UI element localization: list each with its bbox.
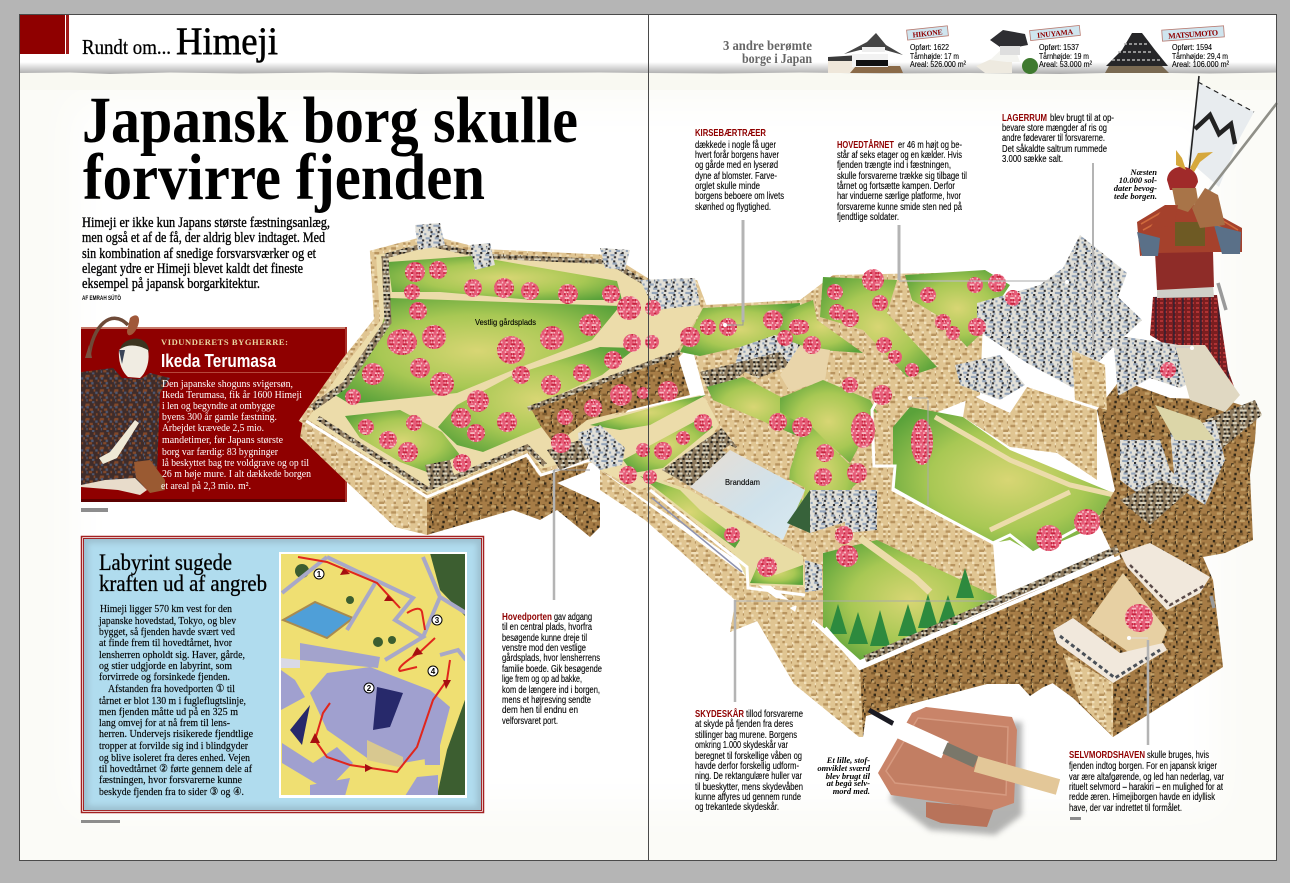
numbered markers	[314, 569, 442, 693]
callout: Skydeskår: ning. De rektangulære huller var	[695, 771, 802, 782]
header: Rundt om... Himeji	[82, 20, 278, 63]
grey end bar	[81, 820, 120, 823]
label Matsumoto: MATSUMOTO	[1168, 28, 1218, 41]
callout: Skydeskår: SKYDESKÅR	[695, 707, 745, 720]
main title: forvirre fjenden	[83, 141, 485, 214]
main keep tower complex	[977, 235, 1142, 388]
Inuyama facts: Opført: 1537	[1039, 42, 1079, 52]
western courtyard ground	[303, 238, 705, 497]
Hikone facts: Opført: 1622	[910, 42, 949, 52]
biography: mandetimer, før Japans største	[162, 434, 283, 446]
callout: small sword caption: at begå selv-	[827, 778, 870, 788]
leader: Kirsebærtræer	[723, 220, 743, 327]
callout: Selvmordshaven: rituelt selvmord – harakiri – en mulighed for at	[1069, 782, 1223, 793]
samurai figure	[1137, 150, 1242, 395]
small gatehouse cluster	[787, 490, 877, 592]
callout: Skydeskår: kunne affyres ud gennem runde	[695, 792, 801, 803]
red enemy route	[298, 557, 450, 772]
callout: Hovedporten	[502, 612, 602, 727]
Hikone facts: Tårnhøjde: 17 m	[910, 51, 959, 61]
biography: Den japanske shoguns svigersøn,	[162, 378, 293, 390]
biography: i len og begyndte at ombygge	[162, 400, 275, 412]
intro text: Himeji er ikke kun Japans største fæstningsanlæg,	[82, 215, 330, 231]
lawn: upper central	[680, 303, 800, 356]
callout: Hovedtårnet: forsvarerne kunne smide sten ned på	[837, 201, 962, 213]
callout: Hovedporten: gårdsplads, hvor lensherrens	[502, 652, 600, 664]
callout: Kirsebærtræer: orglet skulle minde	[695, 181, 760, 192]
callout: Kirsebærtræer: KIRSEBÆRTRÆER	[695, 128, 767, 139]
biography: 26 m høje mure. I alt dækkede borgen	[162, 468, 311, 480]
illustration: samurai with banner	[1137, 76, 1277, 395]
lawn: cedar garden	[823, 540, 997, 660]
Inuyama facts: Areal: 53.000 m²	[1039, 59, 1092, 69]
callout: Hovedtårnet: fjenden trængte ind i fæstningen,	[837, 160, 951, 171]
south parapet of the west court	[306, 421, 590, 497]
inner wall with shaded face	[530, 353, 690, 445]
forest	[295, 553, 466, 796]
numbered markers: 3	[435, 616, 440, 625]
callout: Næsten 10.000 soldater: 10.000 sol-	[1119, 175, 1157, 185]
grey end bar	[81, 508, 108, 512]
lower gate building	[1053, 618, 1167, 683]
numbered markers: 1	[317, 570, 322, 579]
callout: small sword caption: blev brugt til	[826, 771, 871, 781]
callout: Selvmordshaven: skulle bruges, hvis	[1147, 750, 1209, 761]
intro text: AF EMRAH SÜTÖ	[82, 293, 121, 302]
Matsumoto castle fact box	[1105, 26, 1229, 73]
callout: Hovedtårnet: fjendtlige soldater.	[837, 212, 899, 223]
biography: et areal på 2,3 mio. m².	[161, 480, 251, 492]
Inuyama facts: Tårnhøjde: 19 m	[1039, 51, 1089, 61]
map ground	[281, 554, 465, 795]
lawn: north band	[388, 256, 622, 300]
biography: byens 300 år gamle fæstning.	[162, 411, 277, 423]
main keep stone base	[963, 387, 1097, 480]
panel body text: Himeji ligger 570 km vest for den	[100, 603, 232, 615]
callout: Skydeskår	[695, 707, 803, 813]
callout: Hovedporten: dem hen til endnu en	[502, 705, 578, 716]
callout: Lagerrum: LAGERRUM	[1002, 113, 1047, 124]
intro text: elegant ydre er Himeji blevet kaldt det fineste	[82, 261, 303, 277]
callout: Kirsebærtræer: skønhed og flygtighed.	[695, 202, 771, 213]
header: 3 andre berømte borge i Japan	[723, 38, 812, 66]
panel body text: herren. Undervejs risikerede fjendtlige	[99, 728, 253, 740]
fire pond	[690, 450, 805, 540]
lawn: east garden	[893, 407, 1123, 553]
callout: Lagerrum: blev brugt til at op-	[1050, 113, 1114, 124]
panel body text: tropper at forvilde sig ind i blindgyder	[99, 740, 248, 752]
callout: Hovedporten: Hovedporten	[502, 612, 552, 623]
callout: Skydeskår: og trekantede skydeskår.	[695, 801, 779, 813]
lawn: lower terrace	[590, 395, 706, 430]
main south-east wall mass	[1019, 380, 1257, 737]
callout: Skydeskår: beregnet til forskellige våben og	[695, 750, 802, 762]
callout: Næsten 10.000 soldater: Næsten	[1130, 167, 1157, 177]
name heading: Ikeda Terumasa	[161, 351, 277, 371]
Hikone castle fact box	[828, 26, 966, 73]
gate buildings	[547, 335, 830, 470]
header: Rundt om... Himeji: Himeji	[176, 20, 278, 63]
header band with torn paper edge	[20, 15, 1277, 90]
Matsumoto facts	[1172, 42, 1229, 69]
callout: Hovedtårnet: HOVEDTÅRNET	[837, 138, 894, 151]
Inuyama castle fact box	[976, 25, 1092, 74]
blue panel background	[82, 536, 484, 812]
callout: Hovedtårnet: står af seks etager og en kælder. Hvis	[837, 149, 962, 161]
callout: Kirsebærtræer	[695, 128, 784, 213]
east garden court wall	[873, 410, 997, 597]
callout: Skydeskår: tillod forsvarerne	[746, 709, 803, 720]
paths across the east garden	[935, 417, 1123, 530]
panel body text: lang omvej for at nå frem til lens-	[99, 717, 230, 729]
callout: Hovedporten: til en central plads, hvorfra	[502, 622, 592, 633]
lawn: south-west corner	[345, 410, 460, 472]
callout: small sword caption: omviklet sværd	[817, 763, 871, 773]
Matsumoto facts: Tårnhøjde: 29,4 m	[1172, 51, 1228, 61]
callout: Selvmordshaven	[1069, 750, 1224, 820]
callout: Skydeskår: at skyde på fjenden fra deres	[695, 718, 793, 730]
tray top	[878, 707, 1017, 810]
callout: Kirsebærtræer: hvert forår borgens haver	[695, 149, 780, 161]
callout: Hovedporten: gav adgang	[554, 612, 592, 623]
banner flag	[1186, 76, 1254, 200]
Matsumoto facts: Opført: 1594	[1172, 42, 1212, 52]
central ward ground	[600, 272, 985, 627]
biography: Arbejdet krævede 2,5 mio.	[162, 422, 264, 434]
panel body text: til hovedtårnet ② førte gennem dele af	[99, 763, 252, 775]
cherry blossom trees	[345, 261, 1176, 632]
callout: Skydeskår: til bueskytter, mens skydevåben	[695, 781, 803, 793]
Inuyama facts	[1039, 42, 1092, 69]
biography: lå beskyttet bag tre voldgrave og op til	[162, 457, 309, 469]
panel body text: beskyde fjenden fra to sider ③ og ④.	[99, 786, 244, 798]
callout: Skydeskår: stillinger bag murene. Borgens	[695, 730, 797, 741]
callout: Næsten 10.000 soldater	[1114, 167, 1157, 201]
lower tan tower base	[1063, 653, 1113, 737]
panel heading: kraften ud af angreb	[99, 571, 267, 596]
panel heading: Labyrint sugede	[99, 550, 232, 575]
route map	[279, 552, 467, 798]
callout: small sword caption: Et lille, stof-	[826, 755, 870, 765]
lawn: middle terrace	[438, 347, 636, 452]
callout: Selvmordshaven: fjenden indtog borgen. For en japansk kriger	[1069, 761, 1217, 772]
long parapet along south wall	[825, 557, 1120, 668]
corner towers	[415, 223, 700, 485]
panel body text: Afstanden fra hovedporten ① til	[108, 683, 235, 695]
callout: Kirsebærtræer: dækkede i nogle få uger	[695, 139, 777, 151]
panel body text: at finde frem til hovedtårnet, hvor	[99, 637, 232, 649]
leader: inner gate marker	[908, 396, 928, 505]
main title: Japansk borg skulle	[82, 84, 578, 157]
label Inuyama: INUYAMA	[1037, 27, 1074, 40]
panel body text: men fjenden måtte ud på en 325 m	[99, 706, 238, 718]
intro text: men også et af de få, der aldrig blev indtaget. Med	[82, 230, 325, 246]
knife	[869, 710, 1058, 787]
illustration: Himeji castle cutaway	[300, 223, 1262, 737]
callout: Lagerrum: Det såkaldte saltrum rummede	[1002, 143, 1107, 155]
intro text: eksempel på japansk borgarkitektur.	[82, 276, 260, 292]
leader: Lagerrum	[1093, 163, 1194, 350]
callout: Lagerrum: andre fødevarer til forsvarerne.	[1002, 133, 1105, 144]
west wall, sunlit stone	[300, 420, 427, 535]
grey end mark	[1211, 596, 1214, 608]
Matsumoto facts: Areal: 106.000 m²	[1172, 59, 1229, 69]
garden strip south of the pond	[630, 470, 805, 587]
callout: Selvmordshaven: redde æren. Himejiborgen havde en idyllisk	[1069, 792, 1216, 803]
seppuku garden court	[1087, 573, 1167, 658]
callout: Lagerrum: 3.000 sække salt.	[1002, 154, 1063, 165]
leader: Skydeskår	[735, 600, 1000, 702]
panel: Ikeda Terumasa	[81, 315, 347, 502]
callout: Skydeskår: havde derfor forskellig udform-	[695, 761, 799, 772]
intro text: sin kombination af snedige forsvarsværker og et	[82, 246, 317, 262]
Hikone facts: Areal: 526.000 m²	[910, 59, 966, 69]
panel body text: bygget, så fjenden havde svært ved	[99, 626, 235, 638]
cedar trees	[829, 568, 974, 646]
panel body text: og blive isoleret fra deres enhed. Vejen	[99, 752, 250, 764]
main title	[82, 84, 578, 214]
icon: Inuyama castle	[976, 30, 1038, 74]
east upper buildings	[1113, 335, 1262, 525]
route arrowheads	[310, 568, 451, 772]
callout: Hovedporten: kom de længere ind i borgen,	[502, 685, 600, 696]
panel background	[81, 327, 347, 502]
callout: Hovedporten: lige frem og op ad bakke,	[502, 674, 582, 685]
tray shadow	[890, 720, 1022, 835]
callout: Hovedporten: mens et højresving sendte	[502, 695, 591, 706]
north parapet	[385, 244, 695, 288]
callout leader lines	[554, 163, 1194, 745]
header: 3 andre berømte borge i Japan: 3 andre berømte	[723, 38, 812, 53]
fire pond inner wall	[662, 428, 737, 487]
south gate block	[730, 592, 820, 653]
panel: Labyrint	[82, 536, 484, 812]
lower terrace ground	[580, 395, 725, 490]
intro text	[82, 215, 330, 302]
numbered markers: 2	[367, 684, 372, 693]
lawn: western court	[335, 298, 620, 404]
tray foot	[926, 802, 994, 827]
biography: Ikeda Terumasa, fik år 1600 Himeji	[162, 389, 302, 401]
callout: Kirsebærtræer: dyne af blomster. Farve-	[695, 171, 777, 182]
panel body text: fæstningen, hvor forsvarerne kunne	[99, 774, 242, 786]
west inner parapet	[312, 256, 388, 408]
callout: Hovedtårnet: er 46 m højt og be-	[898, 140, 962, 151]
west wall, shaded stone	[427, 455, 590, 535]
callout: Kirsebærtræer: og gårde med en lyserød	[695, 159, 778, 171]
biography	[161, 378, 311, 492]
Hikone facts	[910, 42, 966, 69]
header: 3 andre berømte borge i Japan: borge i Japan	[742, 51, 812, 66]
illustration: tanto knife on wooden tray	[869, 707, 1058, 835]
callout: Kirsebærtræer: borgens beboere om livets	[695, 191, 784, 202]
numbered markers: 4	[431, 667, 436, 676]
biography: borg var færdig: 83 bygninger	[162, 446, 278, 458]
panel body text: lensherren opholdt sig. Haver, gårde,	[99, 649, 245, 661]
pond	[283, 602, 353, 638]
castle label: Vestlig gårdsplads: Vestlig gårdsplads	[475, 317, 536, 327]
icon: Matsumoto castle	[1105, 33, 1169, 73]
callout: Hovedporten: venstre mod den vestlige	[502, 643, 586, 654]
leader: Hovedtårnet	[899, 225, 1069, 284]
callout: Hovedtårnet: skulle forsvarerne trække sig tilbage til	[837, 171, 967, 182]
south-east gate building	[1120, 543, 1210, 610]
central tan walls around the fire pond	[707, 372, 830, 480]
callout: Næsten 10.000 soldater: tede borgen.	[1114, 191, 1157, 201]
leader: Selvmordshaven	[1127, 636, 1148, 745]
keep south annex	[1072, 350, 1107, 410]
castle label: Branddam: Branddam	[725, 477, 760, 487]
leader: Hovedporten	[554, 470, 590, 600]
grey end mark	[1218, 283, 1226, 310]
callout: Lagerrum	[1002, 113, 1114, 165]
callout: Næsten 10.000 soldater: dater bevog-	[1114, 183, 1157, 193]
callout: Hovedtårnet: tårnet og fortsætte kampen. Derfor	[837, 180, 956, 192]
map buildings	[281, 643, 450, 796]
callout: Hovedporten: besøgende kunne dreje til	[502, 633, 587, 644]
south-east shaded wall	[860, 558, 1130, 737]
map frame	[279, 552, 467, 798]
map walls	[282, 557, 466, 660]
panel body text: tårnet er blot 130 m i fugleflugtslinje,	[99, 695, 246, 707]
callout: Selvmordshaven: var ære altafgørende, og led han nederlag, var	[1069, 772, 1224, 783]
panel body text: forvirrede og forsinkede fjenden.	[99, 671, 230, 683]
header: Rundt om... Himeji: Rundt om...	[82, 35, 171, 59]
panel body text: japanske hovedstad, Tokyo, og blev	[98, 615, 236, 627]
white parapet of the east garden	[872, 395, 1130, 553]
callout: Hovedporten: familie boede. Gik besøgende	[502, 664, 602, 675]
label Hikone: HIKONE	[912, 27, 943, 39]
icon: Hikone castle	[828, 33, 903, 73]
callout: small sword caption	[817, 755, 871, 796]
lawn: south-central garden	[785, 420, 860, 525]
callout: Hovedtårnet	[837, 138, 967, 223]
katana	[1208, 103, 1277, 192]
lawn: above the pond	[707, 377, 800, 437]
callout: Skydeskår: omkring 1.000 skydeskår var	[695, 739, 788, 751]
panel body text: og stier udgjorde en labyrint, som	[99, 660, 232, 672]
callout: Selvmordshaven: have, der var indrettet til formålet.	[1069, 802, 1182, 814]
portrait of Ikeda	[81, 315, 170, 495]
south wall sunlit stone	[600, 470, 863, 737]
callout: Hovedtårnet: har vinduerne særlige platforme, hvor	[837, 191, 961, 202]
callout: small sword caption: mord med.	[833, 786, 870, 796]
kicker: VIDUNDERETS BYGHERRE:	[161, 337, 288, 347]
panel body text	[98, 603, 253, 798]
outer gate wall	[557, 483, 600, 537]
callout: Lagerrum: bevare store mængder af ris og	[1002, 123, 1107, 134]
red header tab	[20, 15, 69, 54]
lawn: keep garden	[905, 270, 1010, 347]
callout: Selvmordshaven: SELVMORDSHAVEN	[1069, 750, 1145, 761]
panel heading	[99, 550, 267, 596]
callout: Hovedporten: velforsvaret port.	[502, 716, 558, 727]
